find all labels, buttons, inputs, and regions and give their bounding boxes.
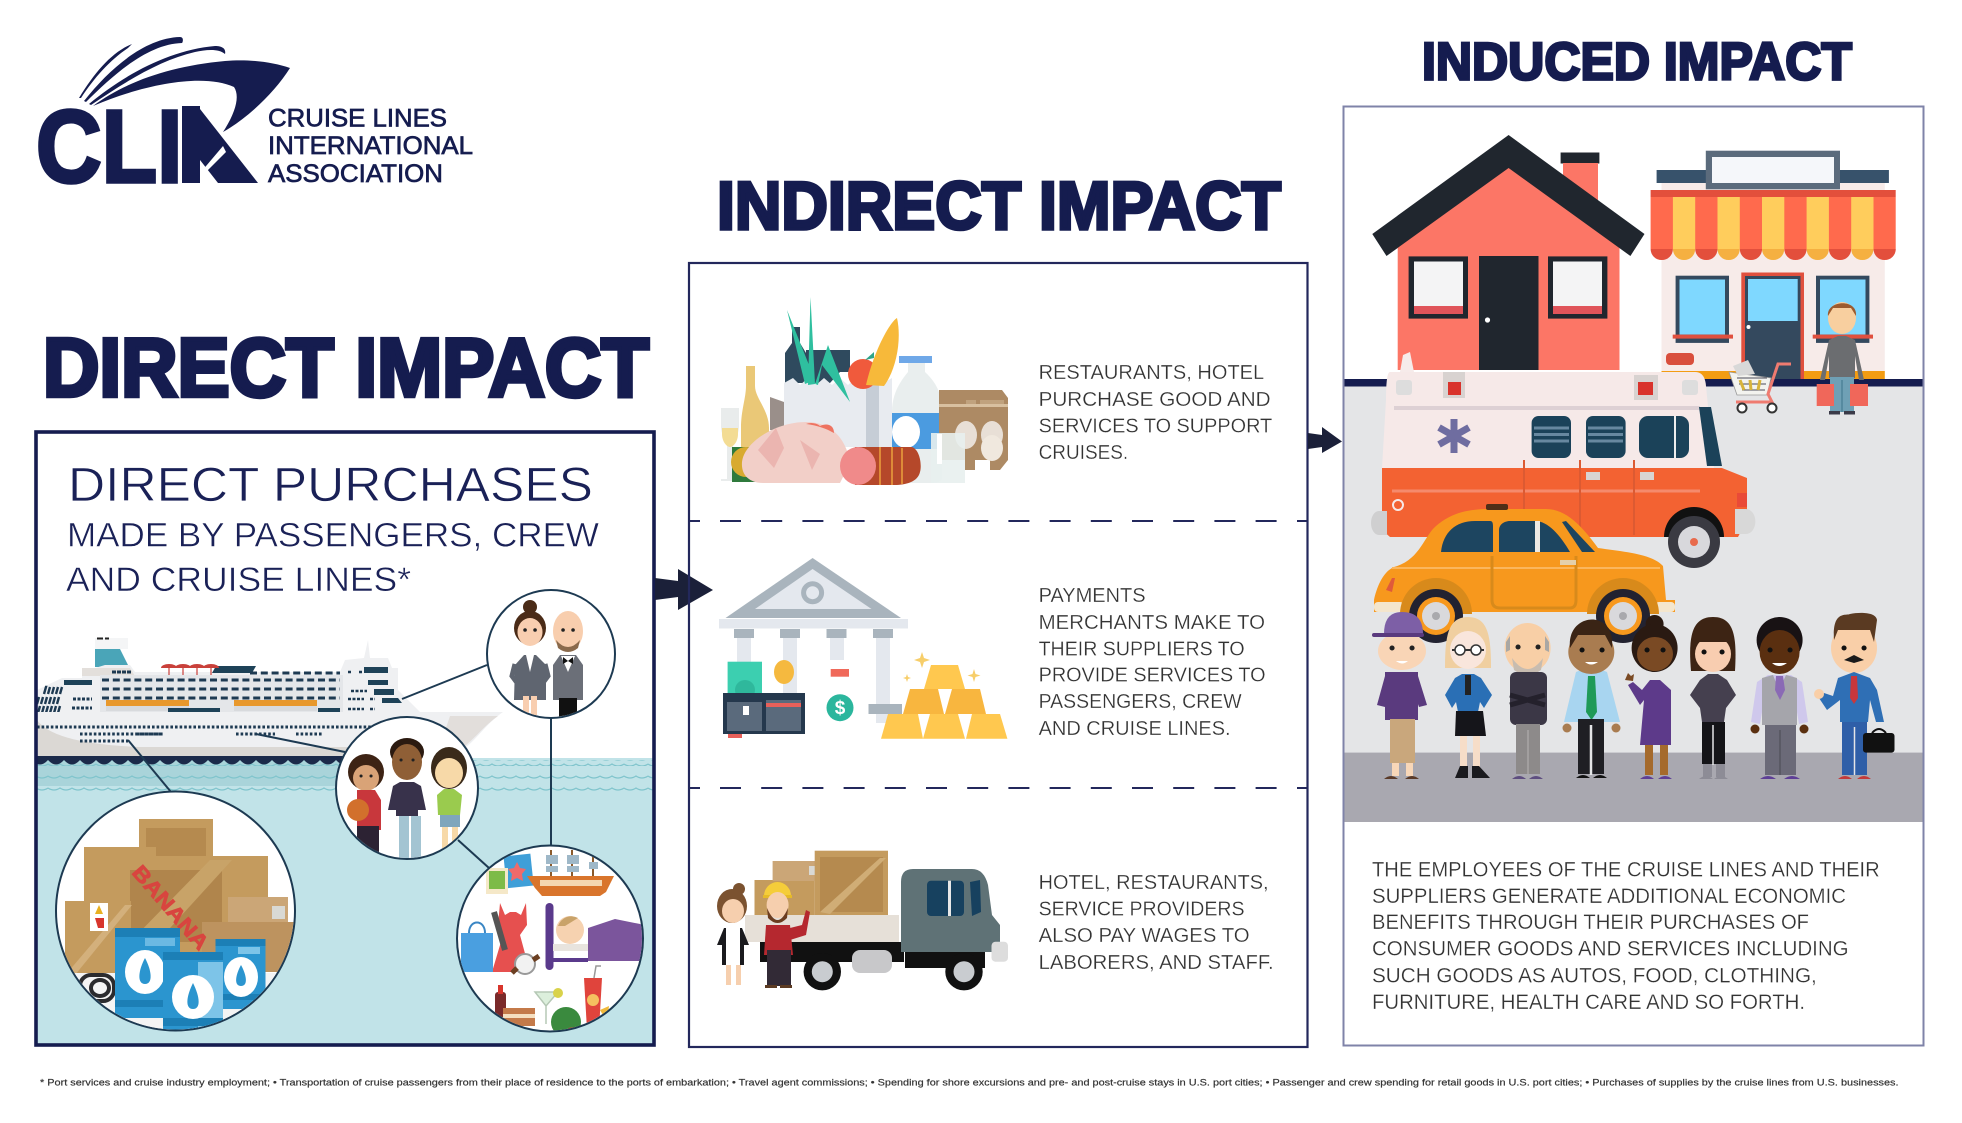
logo: CLIA: INTERNATIONAL bbox=[268, 132, 473, 160]
panel text: direct purchases bbox=[66, 459, 599, 599]
icon: bank and gold bbox=[719, 558, 1007, 739]
icon: house bbox=[1372, 135, 1644, 370]
person: bald man bbox=[1505, 623, 1551, 779]
text: payments: MERCHANTS MAKE TO bbox=[1039, 612, 1265, 634]
passenger: man bbox=[388, 738, 426, 860]
panel text: direct purchases: DIRECT PURCHASES bbox=[68, 459, 593, 512]
text: payments: AND CRUISE LINES. bbox=[1039, 718, 1231, 740]
icon: bank and gold: $ bbox=[835, 698, 846, 719]
text: induced description: BENEFITS THROUGH THEIR PURCHASES OF bbox=[1372, 911, 1809, 934]
text: restaurants: RESTAURANTS, HOTEL bbox=[1039, 362, 1264, 384]
warning label bbox=[90, 903, 108, 931]
heading: induced impact: INDUCED IMPACT bbox=[1422, 32, 1852, 92]
text: induced description: CONSUMER GOODS AND SERVICES INCLUDING bbox=[1372, 938, 1849, 961]
arrow: direct to indirect bbox=[655, 569, 713, 610]
person: vest man bbox=[1750, 617, 1808, 779]
icon: storefront bbox=[1651, 151, 1896, 379]
logo: CLIA: CLIA bbox=[36, 89, 248, 204]
passenger: child with ball bbox=[347, 754, 384, 860]
footnote: * Port services and cruise industry employment; • Transportation of cruise passengers from their place of residence to the ports of embarkation; • Travel agent commissions; • Spending for shore excursions and pre- and post-cruise stays in U.S. port cities; • Passenger and crew spending for retail goods in U.S. port cities; • Purchases of supplies by the cruise lines from U.S. businesses. bbox=[40, 1078, 1898, 1089]
person: mustache man with briefcase bbox=[1814, 613, 1894, 779]
panel: indirect impact bbox=[689, 263, 1308, 1047]
row: wages bbox=[717, 851, 1274, 990]
shopper bbox=[1817, 302, 1868, 414]
model ship bbox=[527, 850, 614, 896]
street background bbox=[1344, 379, 1923, 822]
text: restaurants: CRUISES. bbox=[1039, 442, 1128, 464]
text: wages: LABORERS, AND STAFF. bbox=[1039, 952, 1274, 974]
anchor chain bbox=[80, 975, 114, 1001]
pictures bbox=[486, 854, 534, 894]
connector lines bbox=[128, 665, 551, 868]
logo: CLIA bbox=[38, 37, 472, 185]
food and drinks bbox=[495, 966, 609, 1038]
taxi car bbox=[1374, 504, 1675, 643]
circle: crew bbox=[487, 590, 615, 720]
person: waving woman bbox=[1625, 615, 1678, 779]
text: induced description: FURNITURE, HEALTH CARE AND SO FORTH. bbox=[1372, 991, 1805, 1014]
text: induced description: SUPPLIERS GENERATE ADDITIONAL ECONOMIC bbox=[1372, 885, 1846, 908]
text: wages: ALSO PAY WAGES TO bbox=[1039, 925, 1250, 947]
text: payments bbox=[1039, 585, 1266, 740]
person: green tie bbox=[1562, 619, 1620, 778]
heading: indirect impact: INDIRECT IMPACT bbox=[717, 168, 1281, 244]
text: induced description: THE EMPLOYEES OF THE CRUISE LINES AND THEIR bbox=[1372, 858, 1880, 881]
text: payments: PROVIDE SERVICES TO bbox=[1039, 665, 1266, 687]
text: induced description bbox=[1372, 858, 1880, 1014]
fuel barrels bbox=[115, 928, 266, 1032]
row: groceries bbox=[721, 297, 1272, 485]
group of people bbox=[1372, 612, 1894, 779]
heading: direct impact: DIRECT IMPACT bbox=[43, 321, 649, 414]
worker bbox=[763, 882, 810, 988]
panel text: direct purchases: AND CRUISE LINES* bbox=[66, 561, 411, 599]
text: induced description: SUCH GOODS AS AUTOS, FOOD, CLOTHING, bbox=[1372, 964, 1817, 987]
text: wages: SERVICE PROVIDERS bbox=[1039, 899, 1245, 921]
crew man bbox=[553, 611, 583, 720]
wooden crates bbox=[65, 819, 295, 1033]
person: purple cap bbox=[1372, 612, 1427, 779]
text: wages bbox=[1039, 872, 1274, 974]
text: restaurants: SERVICES TO SUPPORT bbox=[1039, 416, 1272, 438]
shopping cart bbox=[1729, 360, 1791, 412]
text: payments: THEIR SUPPLIERS TO bbox=[1039, 639, 1245, 661]
icon: delivery truck and workers bbox=[717, 851, 1008, 990]
row: payments bbox=[719, 558, 1266, 740]
person: glasses woman bbox=[1445, 617, 1492, 778]
text: restaurants bbox=[1039, 362, 1272, 464]
logo: CLIA: CRUISE LINES bbox=[268, 104, 447, 132]
dress, bag and watch bbox=[461, 903, 539, 974]
text: restaurants: PURCHASE GOOD AND bbox=[1039, 389, 1271, 411]
panel: induced impact bbox=[1344, 106, 1924, 1046]
circle: passengers bbox=[336, 717, 478, 860]
icon: star of life bbox=[1439, 419, 1469, 453]
bed with sleeper bbox=[546, 903, 645, 970]
text: payments: PASSENGERS, CREW bbox=[1039, 691, 1242, 713]
panel text: direct purchases: MADE BY PASSENGERS, CREW bbox=[67, 516, 599, 554]
passenger: woman bbox=[431, 747, 467, 849]
arrow: indirect to induced bbox=[1308, 427, 1342, 453]
circle: retail, lodging and food bbox=[457, 846, 645, 1038]
text: wages: HOTEL, RESTAURANTS, bbox=[1039, 872, 1269, 894]
maid bbox=[717, 883, 749, 985]
crate label: banana: BANANA bbox=[127, 861, 213, 955]
panel: direct purchases bbox=[36, 432, 654, 1045]
cruise ship bbox=[36, 638, 503, 765]
circle: cargo and supplies bbox=[56, 792, 295, 1033]
person: dark jacket woman bbox=[1690, 617, 1736, 779]
crew woman bbox=[512, 600, 548, 718]
logo: CLIA: ASSOCIATION bbox=[268, 160, 443, 188]
icon: groceries bbox=[721, 297, 1008, 485]
ambulance bbox=[1371, 352, 1755, 568]
text: payments: PAYMENTS bbox=[1039, 585, 1146, 607]
